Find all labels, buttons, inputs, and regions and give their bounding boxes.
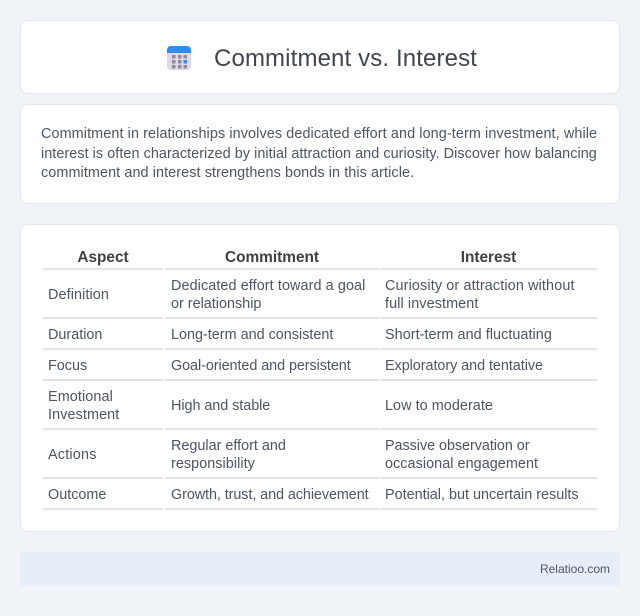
comparison table panel (20, 224, 620, 532)
intro text: commitment and interest strengthens bonds in this article. (41, 165, 414, 181)
Actions: Commitment (171, 438, 286, 472)
Emotional Investment: Interest: Low to moderate (385, 398, 493, 414)
Focus: Interest: Exploratory and tentative (385, 358, 543, 374)
header: Commitment: Commitment (225, 249, 319, 266)
Outcome: Commitment: Growth, trust, and achievement (171, 487, 369, 503)
row: Focus: Focus (48, 358, 87, 374)
Definition: Interest (385, 278, 575, 312)
Outcome: Interest: Potential, but uncertain results (385, 487, 579, 503)
row: Emotional Investment: Emotional (48, 389, 113, 405)
row: Duration: Duration (48, 327, 102, 343)
title: Commitment vs. Interest (214, 45, 477, 72)
Definition: Commitment: Dedicated effort toward a goal (171, 278, 365, 294)
Emotional Investment: Commitment: High and stable (171, 398, 270, 414)
icon: calendar (167, 46, 191, 70)
title card (20, 20, 620, 94)
intro text (41, 126, 597, 181)
intro panel (20, 104, 620, 204)
footer (20, 552, 620, 586)
row: Actions: Actions (48, 447, 97, 463)
Actions: Commitment: Regular effort and (171, 438, 286, 454)
Actions: Interest (385, 438, 538, 472)
Definition: Commitment (171, 278, 365, 312)
footer credit: Relatioo.com (540, 562, 610, 576)
intro text: interest is often characterized by initial attraction and curiosity. Discover how balancing (41, 146, 597, 162)
row: Emotional Investment (48, 389, 120, 423)
intro text: Commitment in relationships involves dedicated effort and long-term investment, while (41, 126, 597, 142)
Definition: Interest: Curiosity or attraction without (385, 278, 575, 294)
Duration: Interest: Short-term and fluctuating (385, 327, 552, 343)
row: Outcome: Outcome (48, 487, 106, 503)
Definition: Interest: full investment (385, 296, 478, 312)
row: Definition: Definition (48, 287, 109, 303)
Actions: Interest: Passive observation or (385, 438, 529, 454)
Duration: Commitment: Long-term and consistent (171, 327, 333, 343)
Actions: Commitment: responsibility (171, 456, 255, 472)
Focus: Commitment: Goal-oriented and persistent (171, 358, 351, 374)
Actions: Interest: occasional engagement (385, 456, 538, 472)
row: Emotional Investment: Investment (48, 407, 119, 423)
Definition: Commitment: or relationship (171, 296, 261, 312)
header: Aspect: Aspect (77, 249, 129, 266)
header: Interest: Interest (461, 249, 516, 266)
